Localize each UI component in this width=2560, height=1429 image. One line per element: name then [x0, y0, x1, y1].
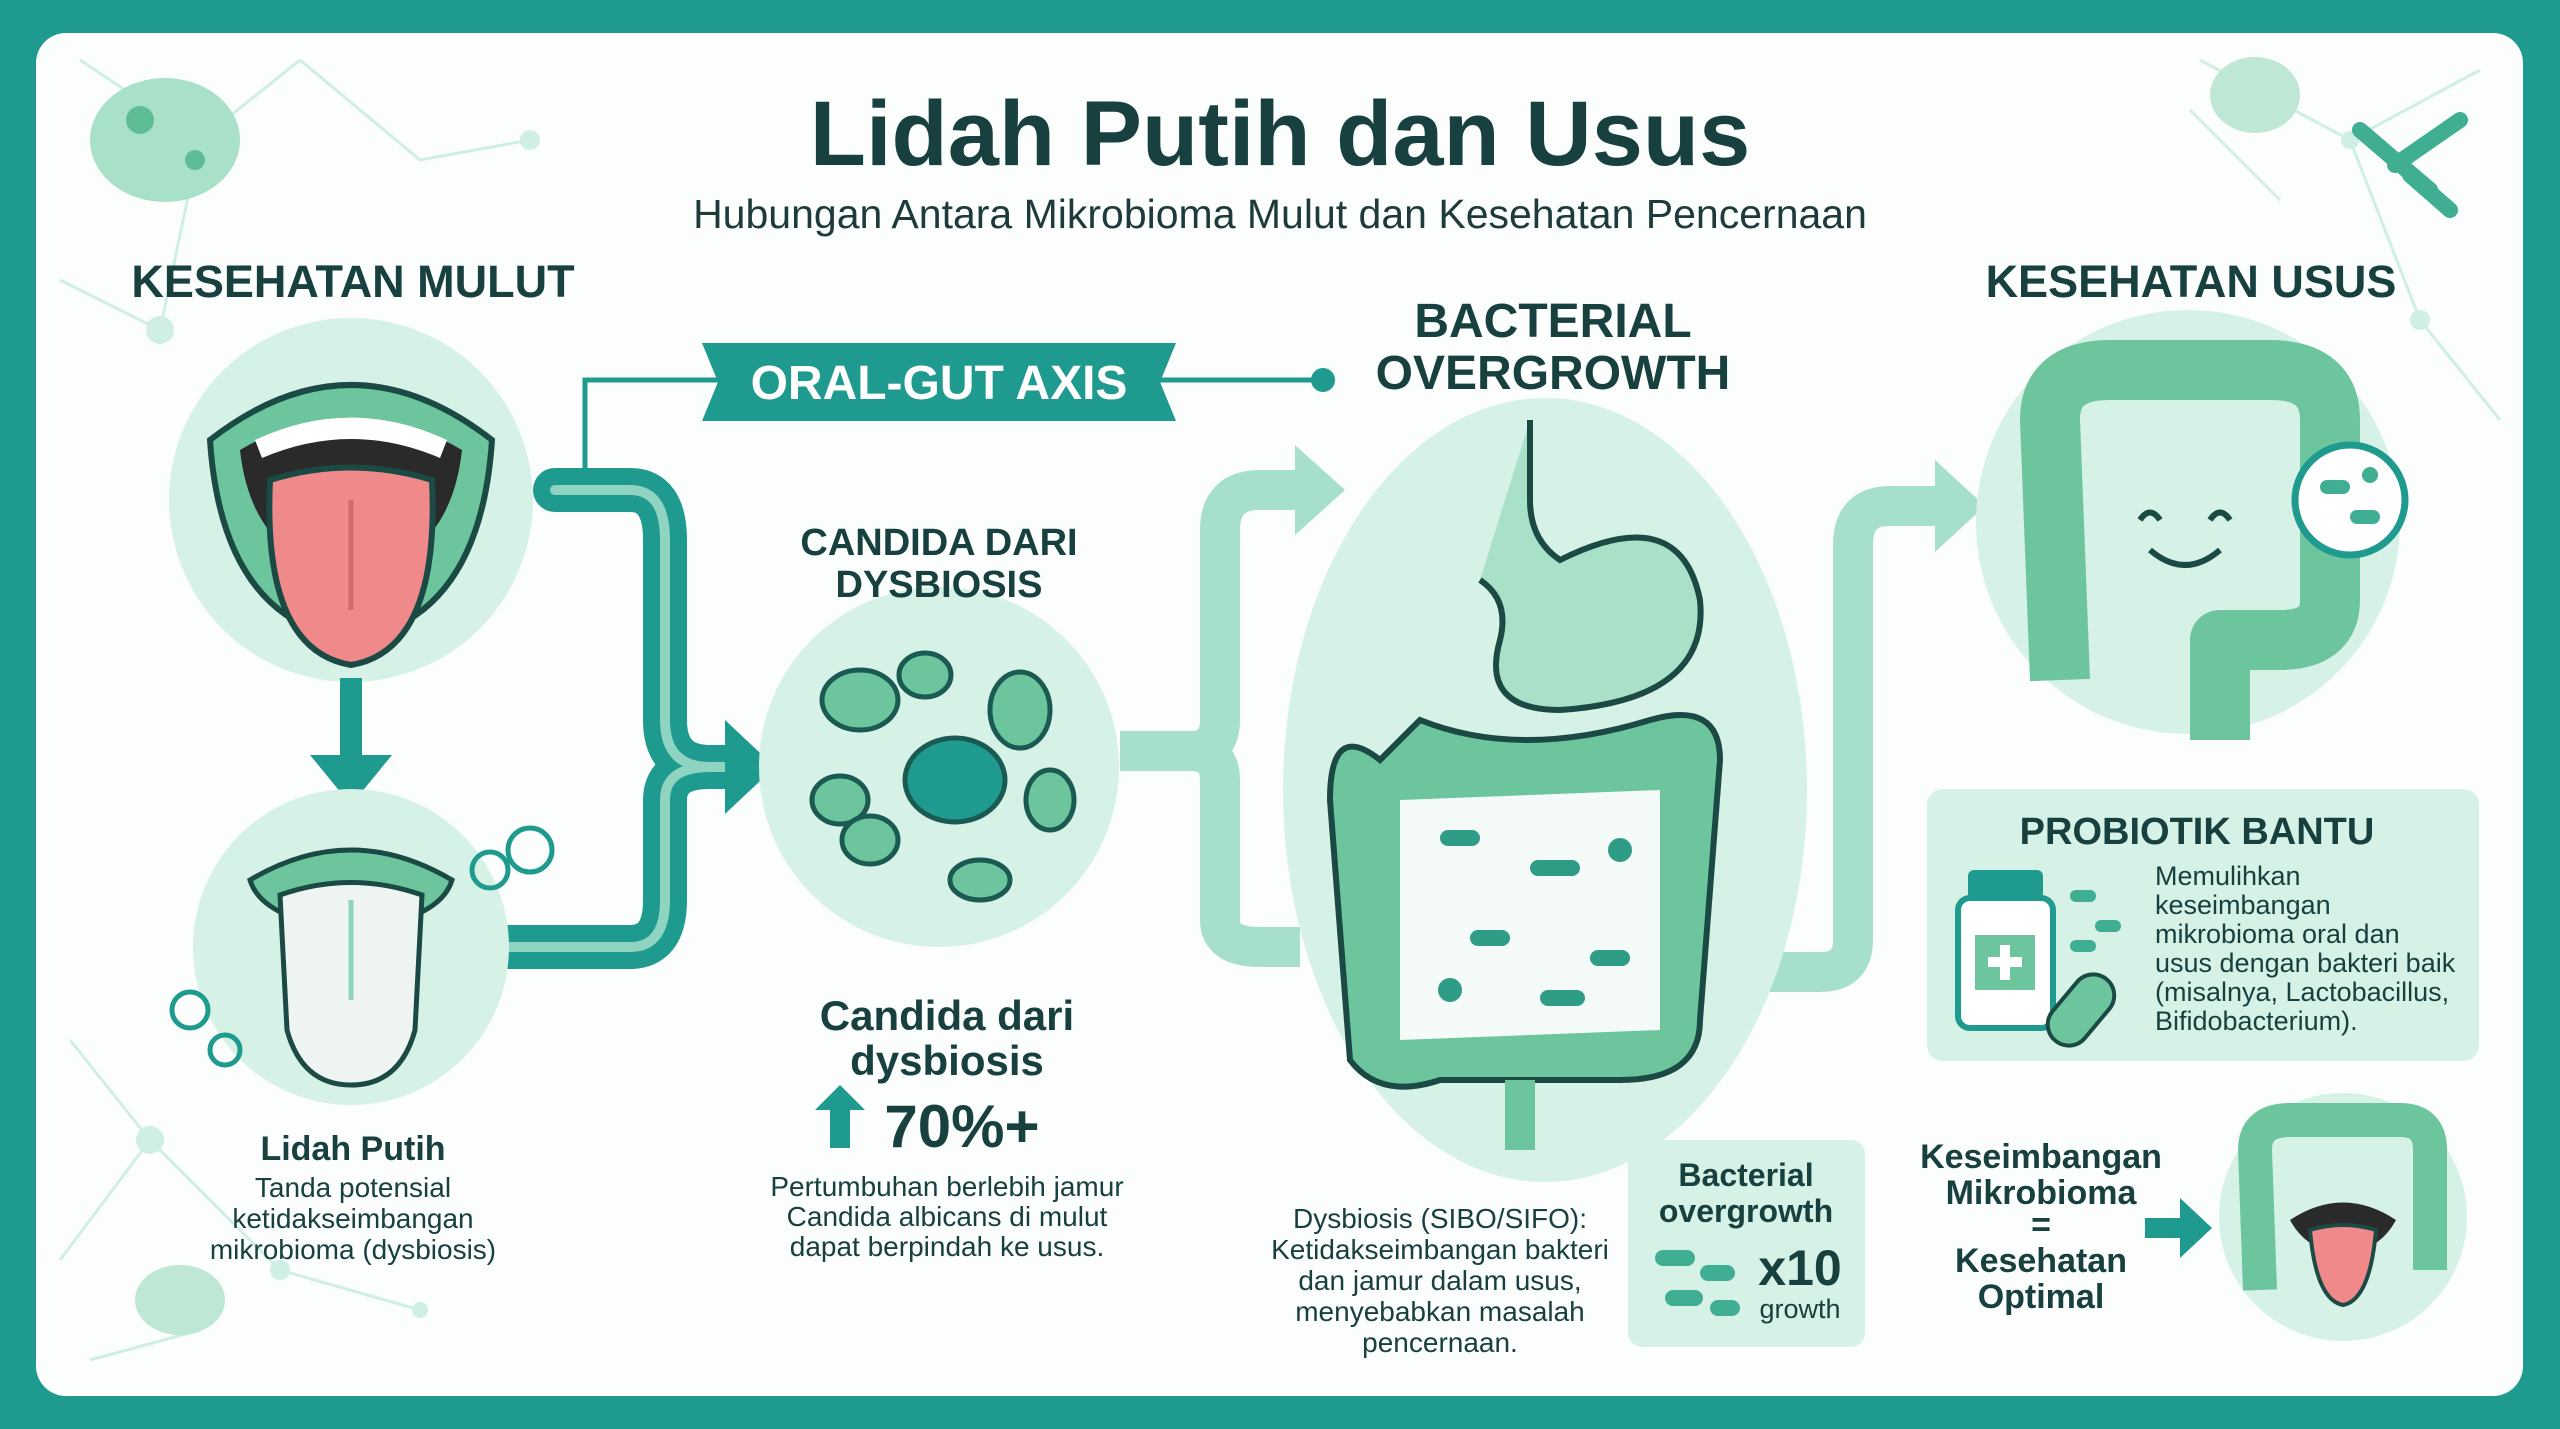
- text block: lidah putih: mikrobioma (dysbiosis): [210, 1234, 496, 1265]
- text block: keseimbangan: Keseimbangan: [1920, 1138, 2162, 1176]
- text block: candida stat: 70%+: [884, 1093, 1040, 1160]
- icon: white tongue: [172, 789, 552, 1105]
- heading: bacterial overgrowth: [1376, 295, 1730, 400]
- heading: bacterial overgrowth: OVERGROWTH: [1376, 347, 1730, 400]
- heading: candida dari dysbiosis: [800, 522, 1078, 606]
- icon: colon with mouth: [2219, 1093, 2467, 1341]
- icon: happy colon: [1976, 310, 2405, 740]
- text block: dysbiosis: [1271, 1203, 1609, 1358]
- icon: open mouth with tongue: [169, 318, 533, 682]
- panel: probiotik bantu: Bifidobacterium).: [2155, 1006, 2358, 1036]
- panel: probiotik bantu: PROBIOTIK BANTU: [2020, 811, 2374, 853]
- banner: ORAL-GUT AXIS: [702, 343, 1176, 421]
- panel: probiotik bantu: keseimbangan: [2155, 890, 2331, 920]
- text block: keseimbangan: Optimal: [1978, 1278, 2104, 1316]
- axis connector line: [585, 380, 1320, 470]
- banner: ORAL-GUT AXIS: ORAL-GUT AXIS: [751, 357, 1127, 410]
- text block: dysbiosis: Ketidakseimbangan bakteri: [1271, 1234, 1609, 1265]
- panel: probiotik bantu: Memulihkan: [2155, 861, 2301, 891]
- panel: probiotik bantu: mikrobioma oral dan: [2155, 919, 2400, 949]
- icon: candida cells: [759, 587, 1119, 947]
- text block: keseimbangan: =: [2031, 1206, 2051, 1244]
- text block: dysbiosis: dan jamur dalam usus,: [1298, 1265, 1582, 1296]
- heading: kesehatan mulut: KESEHATAN MULUT: [131, 256, 575, 307]
- text block: dysbiosis: menyebabkan masalah: [1295, 1296, 1585, 1327]
- callout: bacterial overgrowth x10: Bacterial: [1678, 1157, 1814, 1193]
- heading: candida dari dysbiosis: DYSBIOSIS: [836, 564, 1042, 606]
- arrow: to balance: [2145, 1198, 2212, 1258]
- text block: candida stat: Candida dari: [820, 992, 1074, 1039]
- text block: lidah putih: Tanda potensial: [255, 1172, 451, 1203]
- arrow: gut to usus (light): [1760, 460, 1985, 972]
- panel: probiotik bantu: [1927, 789, 2479, 1061]
- text block: lidah putih: ketidakseimbangan: [232, 1203, 474, 1234]
- heading: kesehatan usus: KESEHATAN USUS: [1986, 256, 2396, 307]
- callout: bacterial overgrowth x10: growth: [1759, 1294, 1841, 1324]
- text block: candida stat: Candida albicans di mulut: [787, 1201, 1108, 1232]
- text block: keseimbangan: Kesehatan: [1955, 1242, 2127, 1280]
- text block: dysbiosis: Dysbiosis (SIBO/SIFO):: [1293, 1203, 1587, 1234]
- text block: candida stat: [770, 992, 1124, 1262]
- panel: probiotik bantu: (misalnya, Lactobacillus,: [2155, 977, 2449, 1007]
- text block: lidah putih: Lidah Putih: [260, 1130, 446, 1168]
- text block: candida stat: Pertumbuhan berlebih jamur: [770, 1171, 1124, 1202]
- arrow: down: [310, 678, 392, 805]
- heading: candida dari dysbiosis: CANDIDA DARI: [800, 522, 1078, 564]
- illustration: stomach and intestines: [1283, 398, 1807, 1182]
- arrow: candida to gut (light): [1120, 445, 1345, 947]
- text block: lidah putih: [210, 1130, 496, 1265]
- text block: candida stat: dysbiosis: [850, 1037, 1044, 1084]
- text block: keseimbangan: [1920, 1138, 2162, 1316]
- title: Lidah Putih dan Usus: [810, 83, 1750, 185]
- text block: keseimbangan: Mikrobioma: [1946, 1174, 2137, 1212]
- text block: candida stat: dapat berpindah ke usus.: [790, 1231, 1104, 1262]
- heading: bacterial overgrowth: BACTERIAL: [1414, 295, 1692, 348]
- callout: bacterial overgrowth x10: x10: [1758, 1240, 1842, 1296]
- text block: dysbiosis: pencernaan.: [1362, 1327, 1518, 1358]
- callout: bacterial overgrowth x10: overgrowth: [1659, 1193, 1833, 1229]
- panel: probiotik bantu: usus dengan bakteri baik: [2155, 948, 2456, 978]
- arrow: mouth to candida (thick teal): [490, 490, 775, 947]
- callout: bacterial overgrowth x10: [1628, 1140, 1865, 1347]
- subtitle: Hubungan Antara Mikrobioma Mulut dan Kesehatan Pencernaan: [693, 191, 1867, 237]
